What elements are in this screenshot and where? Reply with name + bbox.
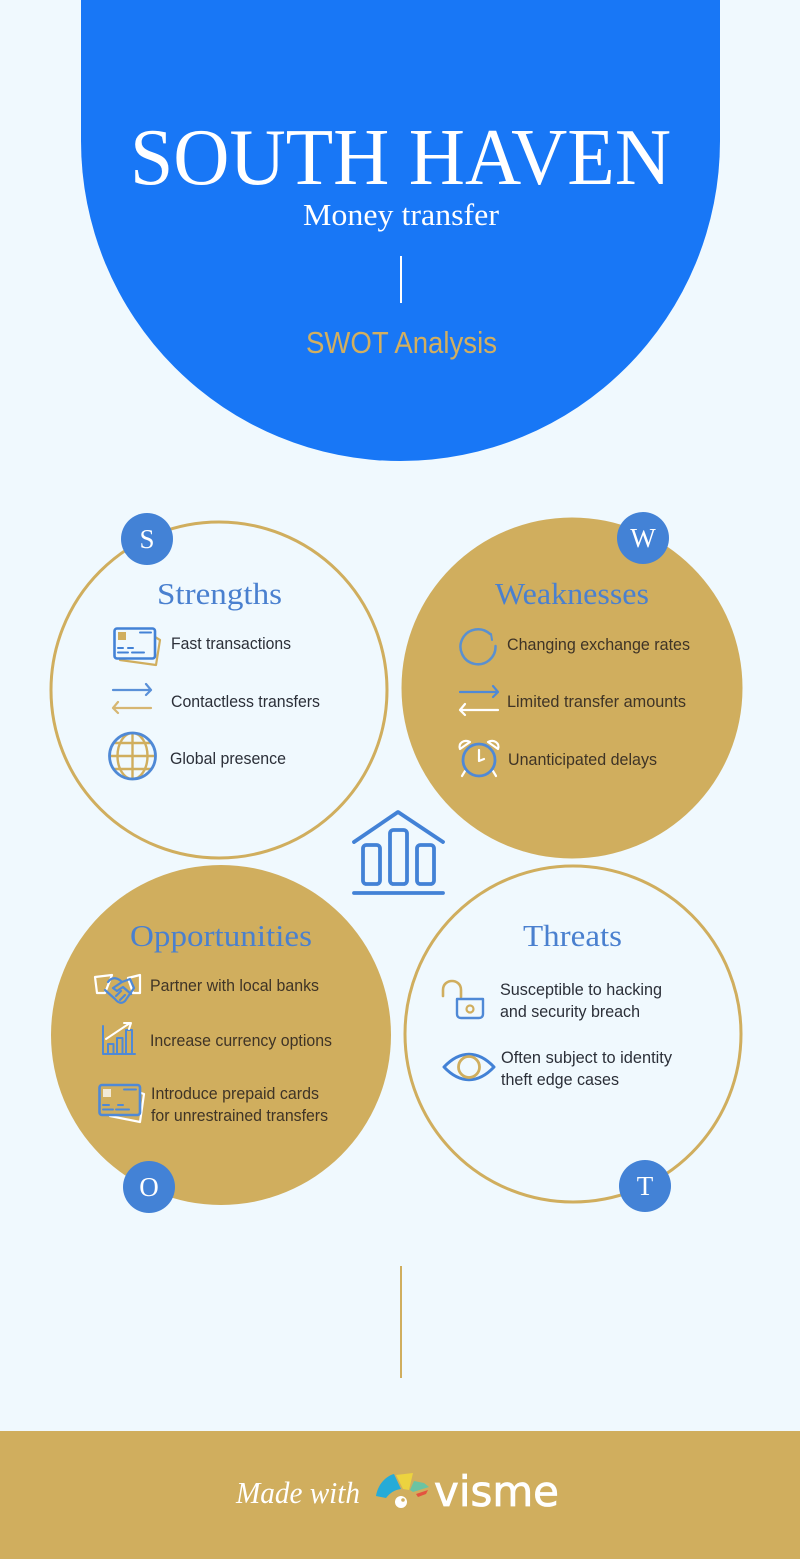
icon: eye xyxy=(444,1054,494,1080)
icon: central bank xyxy=(354,812,443,893)
text: contactless transfers: Contactless transfers xyxy=(171,692,320,711)
visme wordmark: visme xyxy=(434,1467,559,1516)
badge T: T xyxy=(637,1171,654,1201)
badge W xyxy=(617,512,669,564)
icon: cards xyxy=(114,628,160,665)
text: prepaid cards xyxy=(151,1084,328,1125)
panel: weaknesses xyxy=(402,512,742,858)
panel: opportunities xyxy=(51,865,391,1213)
text: changing exchange rates: Changing exchange rates xyxy=(507,635,690,654)
text: unanticipated delays: Unanticipated delays xyxy=(508,750,657,769)
panel: threats xyxy=(405,866,741,1212)
text: partner with local banks: Partner with local banks xyxy=(150,976,319,995)
text: hacking xyxy=(500,980,662,1021)
badge S: S xyxy=(139,524,155,554)
icon: transfer arrows xyxy=(113,684,151,713)
icon: visme logo xyxy=(376,1473,429,1508)
text: increase currency options: Increase currency options xyxy=(150,1031,332,1050)
text: identity theft: theft edge cases xyxy=(501,1070,619,1089)
badge T xyxy=(619,1160,671,1212)
header panel xyxy=(81,0,720,461)
badge O xyxy=(123,1161,175,1213)
text: global presence: Global presence xyxy=(170,749,286,768)
SWOT label: SWOT Analysis xyxy=(306,325,497,360)
text: prepaid cards: Introduce prepaid cards xyxy=(151,1084,319,1103)
subtitle: Money transfer xyxy=(303,197,500,232)
icon: globe xyxy=(110,733,156,779)
icon: open padlock xyxy=(443,981,483,1018)
text: fast transactions: Fast transactions xyxy=(171,634,291,653)
icon: limit arrows xyxy=(460,686,498,715)
text: hacking: and security breach xyxy=(500,1002,640,1021)
text: identity theft: Often subject to identity xyxy=(501,1048,672,1067)
header divider xyxy=(400,256,402,303)
vertical divider xyxy=(400,1266,402,1378)
footer xyxy=(0,1431,800,1559)
heading: strengths: Strengths xyxy=(157,576,282,611)
badge S xyxy=(121,513,173,565)
badge O: O xyxy=(139,1172,159,1202)
text: identity theft xyxy=(501,1048,672,1089)
icon: refresh xyxy=(461,629,496,664)
made with: Made with xyxy=(235,1475,360,1510)
heading: threats: Threats xyxy=(523,918,622,953)
icon: growth chart xyxy=(103,1023,135,1054)
title: SOUTH HAVEN xyxy=(130,114,671,202)
heading: opportunities: Opportunities xyxy=(130,918,312,953)
text: prepaid cards: for unrestrained transfers xyxy=(151,1106,328,1125)
icon: handshake xyxy=(95,975,140,1003)
panel: strengths xyxy=(51,513,387,858)
text: limited transfer amounts: Limited transfer amounts xyxy=(507,692,686,711)
icon: prepaid cards xyxy=(100,1085,144,1122)
icon: alarm clock xyxy=(460,741,498,776)
text: hacking: Susceptible to hacking xyxy=(500,980,662,999)
heading: weaknesses: Weaknesses xyxy=(495,576,649,611)
badge W: W xyxy=(630,523,656,553)
